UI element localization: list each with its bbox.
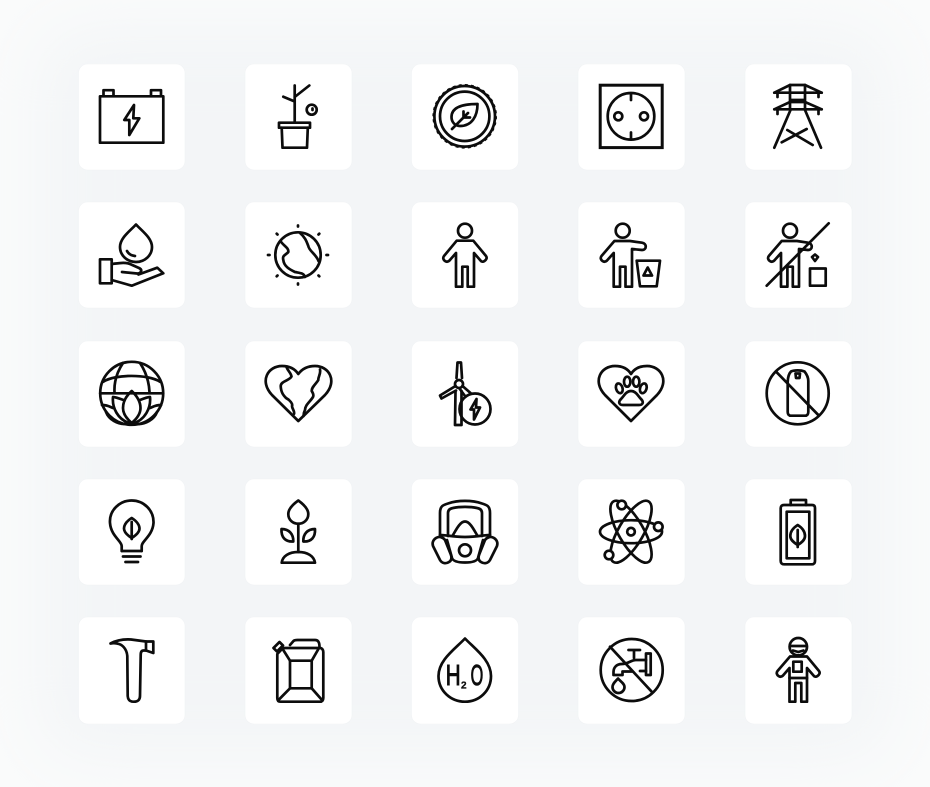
icon: water drop over hand [100,224,163,286]
icon: sapling in pot [279,86,317,148]
tile: eco bulb [78,479,185,585]
icon: spray can prohibited [767,362,829,424]
icon: leaf in scalloped badge [433,85,496,148]
tile: car battery [78,64,185,170]
tile: person using bin [578,202,685,308]
tile: no aerosol [745,341,852,447]
icon: atom [600,495,663,568]
icon: standing person [443,224,487,287]
icon: wind turbine with energy bolt [440,362,490,425]
icon: transmission tower [774,85,822,148]
tile: water drop H2O [412,617,518,724]
tile: earth heart [245,341,352,447]
tile: no littering [745,202,852,308]
icon: light bulb with leaf [110,500,154,562]
tile: sprout [245,479,352,585]
icon: H2O drop [438,638,491,702]
icon: earth with rays [268,226,328,284]
icon: socket [600,85,662,148]
icon: fuel canister [274,640,323,702]
tile: hand holding drop [78,202,185,308]
tile: wind turbine [412,341,518,447]
icon: person throwing litter into bin [601,224,660,287]
icon: heart with continents [266,366,331,421]
icon: person littering crossed out [767,223,829,287]
tile: leaf badge [412,64,518,170]
tile: power pylon [745,64,852,170]
tile: no running water [578,617,685,724]
icon: claw hammer [110,639,153,702]
icon: H2O drop: 2 [461,680,467,691]
tile: atom [578,479,685,585]
tile: shining earth [245,202,352,308]
icon: growing plant [281,500,315,563]
icon: water tap prohibited [601,639,663,701]
tile: paw heart [578,341,685,447]
tile: gas mask [412,479,518,585]
tile: person [412,202,518,308]
icon: globe with lotus [100,362,163,425]
icon: battery with bolt [100,90,163,143]
tile: potted sapling [245,64,352,170]
tile: worker [745,617,852,724]
icon: H2O drop: O [471,659,483,691]
icon: worker with helmet [777,638,820,702]
tile: hammer [78,617,185,724]
icon: paw in heart [599,366,663,421]
icon: respirator mask [433,501,497,563]
tile: globe lotus [78,341,185,447]
tile: jerry can [245,617,352,724]
icon: battery with leaf [781,500,815,564]
icon: H2O drop: H [446,660,461,692]
tile: wall socket [578,64,685,170]
tile: eco battery [745,479,852,585]
